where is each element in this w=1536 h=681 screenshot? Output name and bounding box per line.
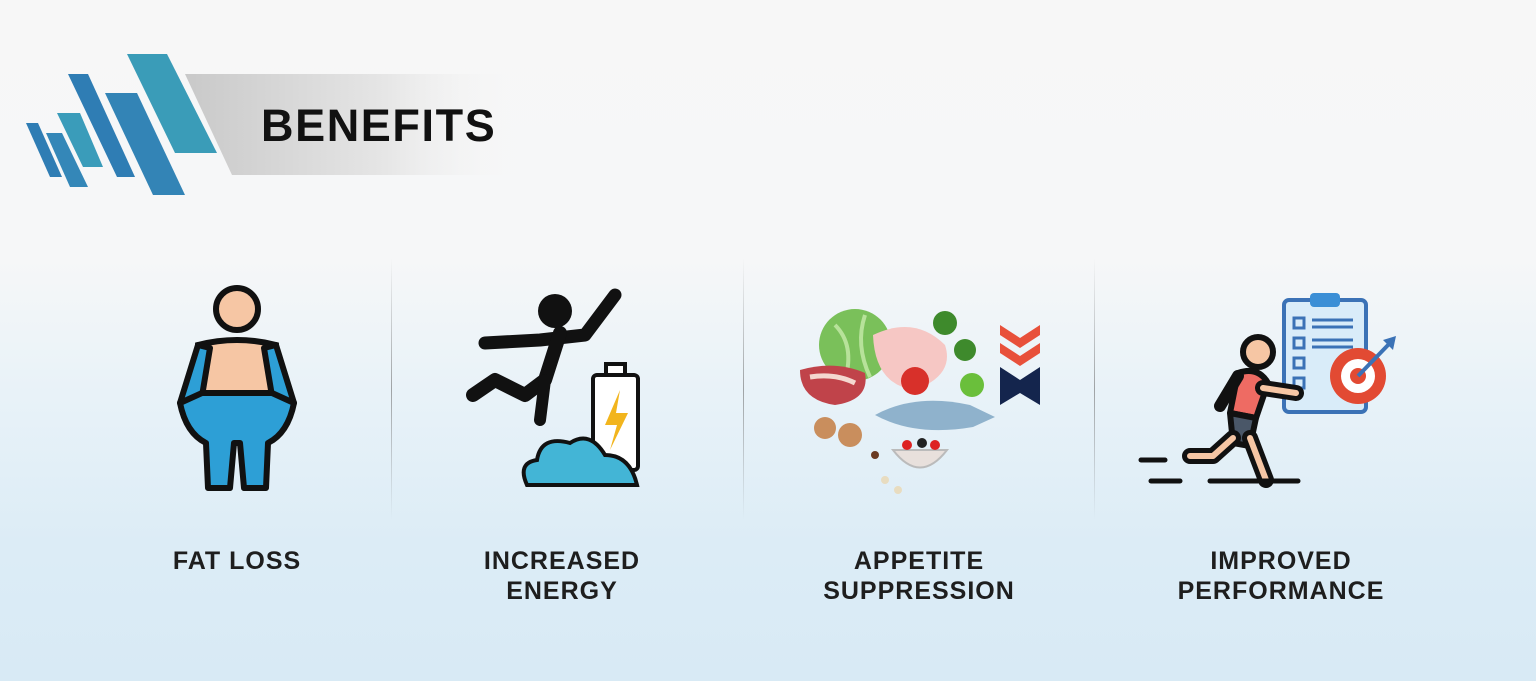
label: increased energy xyxy=(484,547,640,605)
label: increased energy: ENERGY xyxy=(506,577,618,605)
label: increased energy: INCREASED xyxy=(484,547,640,575)
header logo and title xyxy=(26,54,496,195)
label: fat loss: FAT LOSS xyxy=(173,547,301,575)
icon: energy jump xyxy=(466,288,640,487)
title: BENEFITS xyxy=(261,100,496,151)
logo bars xyxy=(26,54,217,195)
label: appetite suppression: SUPPRESSION xyxy=(823,577,1015,605)
label: improved performance: PERFORMANCE xyxy=(1178,577,1384,605)
label: improved performance: IMPROVED xyxy=(1210,547,1352,575)
icon: food / appetite xyxy=(800,309,1040,494)
label: appetite suppression: APPETITE xyxy=(854,547,984,575)
grey band xyxy=(185,74,520,175)
icon: fat loss person xyxy=(177,285,297,491)
icon: runner with clipboard and target xyxy=(1138,293,1396,488)
label: appetite suppression xyxy=(823,547,1015,605)
label: improved performance xyxy=(1178,547,1384,605)
